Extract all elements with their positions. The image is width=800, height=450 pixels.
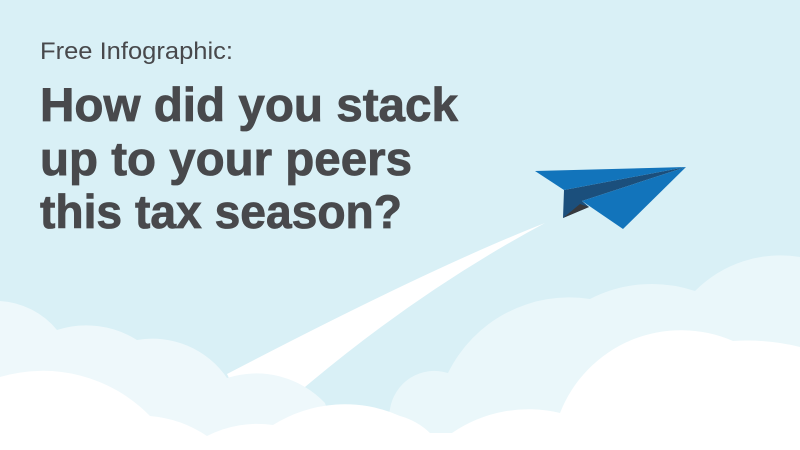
back cloud: right xyxy=(380,255,800,450)
front cloud: white foreground xyxy=(0,330,800,450)
white flight trail xyxy=(227,223,545,400)
title: up to your peers xyxy=(40,132,412,185)
back cloud: left xyxy=(0,301,340,450)
title: How did you stack xyxy=(40,78,459,131)
icon: paper airplane xyxy=(535,167,686,229)
title xyxy=(40,78,459,238)
title: this tax season? xyxy=(40,185,402,238)
eyebrow text: Free Infographic: xyxy=(40,38,233,65)
